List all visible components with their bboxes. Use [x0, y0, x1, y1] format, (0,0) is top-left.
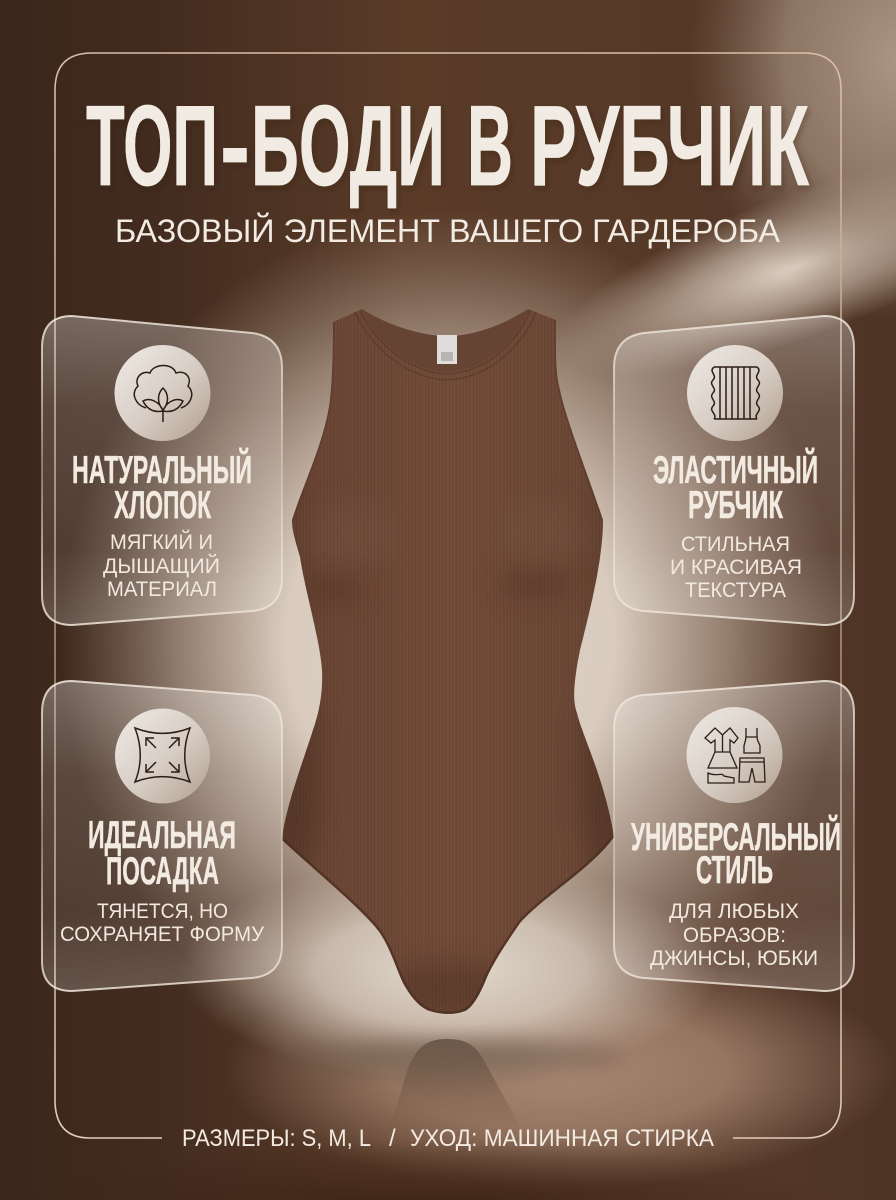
card description: СТИЛЬНАЯ — [681, 533, 790, 556]
subtitle: БАЗОВЫЙ ЭЛЕМЕНТ ВАШЕГО ГАРДЕРОБА — [115, 213, 781, 249]
footer: sizes and care: УХОД: МАШИННАЯ СТИРКА — [410, 1125, 714, 1152]
footer: sizes and care: / — [389, 1125, 396, 1152]
back of neckline — [362, 309, 528, 372]
card description: МАТЕРИАЛ — [107, 578, 217, 601]
card heading line 2: РУБЧИК — [688, 484, 783, 527]
card description: ДЛЯ ЛЮБЫХ — [669, 900, 799, 923]
card description: МЯГКИЙ И — [110, 530, 213, 554]
card description: ОБРАЗОВ: — [683, 924, 786, 947]
card: universal style — [614, 681, 854, 991]
card: perfect fit — [42, 681, 282, 991]
card heading line 2: ХЛОПОК — [114, 484, 211, 527]
card: elastic rib — [614, 316, 854, 625]
title — [86, 83, 809, 210]
card heading line 2: ПОСАДКА — [106, 850, 219, 893]
bodysuit — [270, 300, 630, 1020]
card description: И КРАСИВАЯ — [670, 556, 802, 579]
armhole edge — [292, 320, 603, 520]
leg opening seam — [282, 837, 614, 1014]
card description — [103, 530, 220, 601]
title: ТОП — [86, 83, 218, 210]
garment label — [437, 335, 457, 364]
icon: cotton — [114, 345, 210, 441]
card description — [650, 900, 818, 970]
card description: СОХРАНЯЕТ ФОРМУ — [60, 923, 265, 946]
outer frame — [55, 53, 841, 1138]
card heading line 2: СТИЛЬ — [696, 849, 773, 892]
card: natural cotton — [42, 316, 282, 625]
title: - — [220, 83, 250, 210]
card description: ДЖИНСЫ, ЮБКИ — [650, 947, 818, 970]
card description — [670, 533, 802, 602]
title: БОДИ — [251, 83, 445, 210]
card description: ДЫШАЩИЙ — [103, 554, 220, 578]
icon: ribbed fabric — [687, 345, 783, 441]
reflection of bodysuit on the floor — [388, 1039, 525, 1135]
card heading: ИДЕАЛЬНАЯ — [88, 814, 236, 857]
icon: clothes — [686, 707, 782, 803]
neck seam — [355, 310, 536, 380]
title: В — [467, 83, 513, 210]
footer: sizes and care — [182, 1125, 714, 1152]
card description — [60, 900, 265, 946]
card heading: НАТУРАЛЬНЫЙ — [72, 447, 252, 492]
footer: sizes and care: РАЗМЕРЫ: S, M, L — [182, 1125, 371, 1152]
card description: ТЕКСТУРА — [685, 579, 786, 602]
icon: stretch arrows — [115, 708, 210, 804]
card description: ТЯНЕТСЯ, НО — [97, 900, 228, 923]
floor shadow — [275, 1038, 625, 1074]
